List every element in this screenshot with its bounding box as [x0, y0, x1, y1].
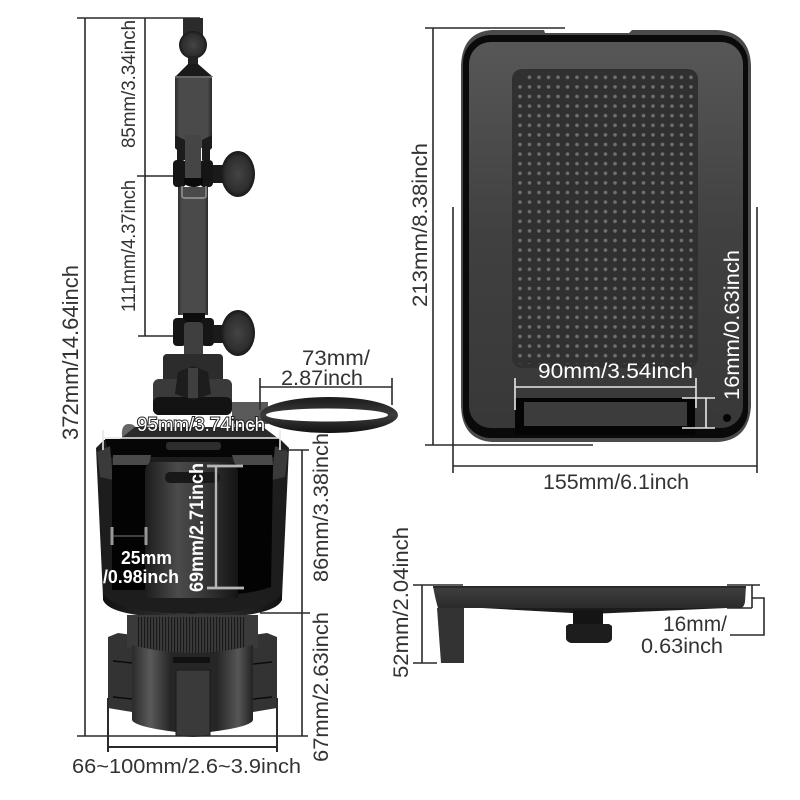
tray side view	[433, 586, 746, 663]
side knob	[566, 610, 612, 643]
label: cup top width: 95mm/3.74inch	[137, 415, 265, 436]
bottom slot	[515, 398, 695, 435]
label: base width: 66~100mm/2.6~3.9inch	[72, 756, 301, 778]
label: slot height: 69mm/2.71inch	[187, 463, 208, 592]
label: slot width: /0.98inch	[103, 567, 179, 587]
label: upper arm length: 85mm/3.34inch	[119, 20, 140, 148]
label: tray height: 213mm/8.38inch	[409, 143, 432, 307]
label: tray width: 155mm/6.1inch	[543, 471, 689, 494]
label: lip height: 16mm/0.63inch	[721, 250, 744, 400]
label: lower arm length: 111mm/4.37inch	[119, 180, 140, 312]
label: side height: 52mm/2.04inch	[390, 527, 413, 678]
label: total height: 372mm/14.64inch	[58, 265, 83, 440]
label: ring diameter: 73mm/	[302, 347, 370, 370]
label: slot width: 25mm	[121, 548, 172, 568]
dimension lines: inside cup	[103, 430, 280, 588]
cup holder body	[96, 424, 289, 618]
label: base height: 67mm/2.63inch	[310, 612, 333, 762]
label: side lip: 16mm/	[663, 613, 727, 636]
tablet tray front view	[461, 30, 751, 442]
label: side lip: 0.63inch	[641, 635, 723, 658]
cup ring holder	[232, 397, 398, 433]
label: slot width on tray: 90mm/3.54inch	[538, 360, 693, 383]
dotted phone pad	[512, 69, 698, 368]
cup holder base	[108, 615, 277, 736]
dimension lines: tray	[413, 28, 764, 663]
phone holder arm	[153, 18, 255, 415]
label: ring diameter: 2.87inch	[281, 367, 363, 390]
label: cup height: 86mm/3.38inch	[310, 433, 333, 582]
dimension lines: left product	[77, 18, 392, 752]
